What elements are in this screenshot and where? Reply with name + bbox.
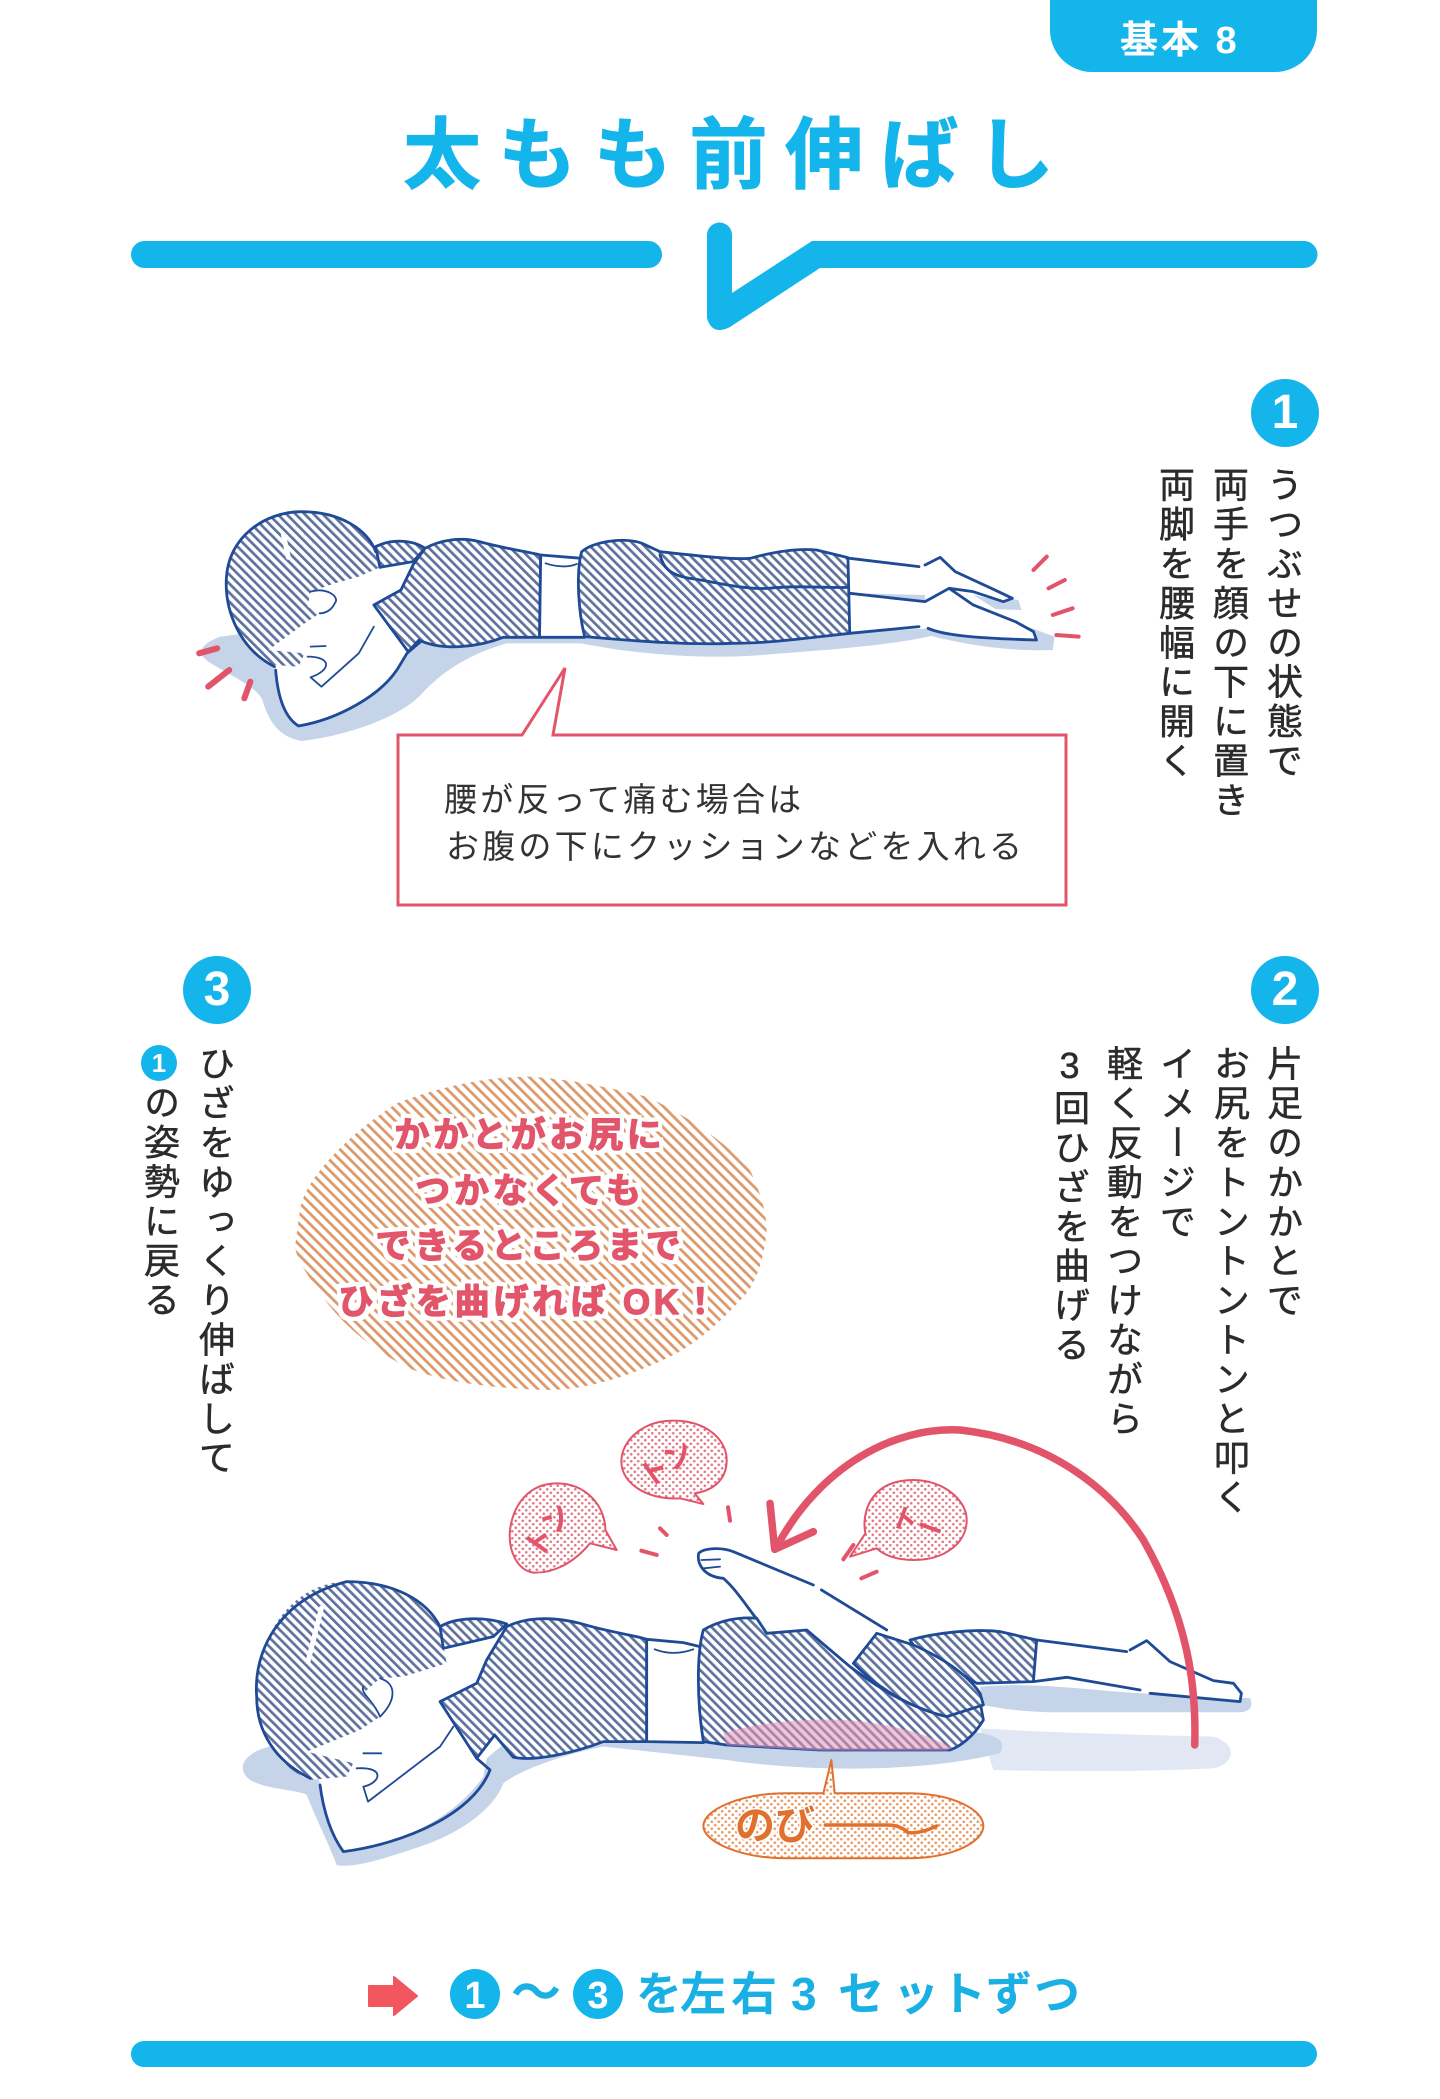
step 2 number <box>1251 956 1319 1024</box>
hips and thighs <box>578 540 850 644</box>
callout: cushion tip <box>398 668 1066 905</box>
pain ticks <box>199 557 1079 698</box>
bottom circled 3: 3 <box>587 1975 609 2017</box>
bottom circled 3 <box>573 1969 623 2019</box>
raised knee <box>853 1633 983 1717</box>
red arrow icon <box>369 1977 417 2015</box>
step 3 number: 3 <box>204 963 230 1016</box>
step 2 text: 3回ひざを曲げる <box>1049 1045 1090 1365</box>
callout text: お腹の下にクッションなどを入れる <box>446 828 1025 865</box>
title underline with check mark <box>131 222 1318 330</box>
blob message: ひざを曲げれば OK！ <box>339 1282 721 1322</box>
blob message: つかなくても <box>415 1172 645 1211</box>
heading tab: 基本 8: 基本 8 <box>1120 20 1240 62</box>
heading tab: 基本 8 <box>1050 0 1317 72</box>
torso <box>374 539 541 652</box>
orange bubble <box>703 1760 983 1858</box>
waist band <box>647 1639 703 1743</box>
hair <box>256 1582 447 1780</box>
stretch wave line <box>825 1825 937 1833</box>
step 3 number <box>183 956 251 1024</box>
lower straight leg <box>1033 1640 1241 1702</box>
tap ticks <box>641 1507 877 1578</box>
callout text: 腰が反って痛む場合は <box>444 781 804 818</box>
near thigh <box>698 1618 983 1750</box>
raised calf and foot <box>698 1549 887 1663</box>
far thigh <box>910 1631 1037 1683</box>
tilde: ～ <box>511 1965 561 2021</box>
step 1 text: 両脚を腰幅に開く <box>1154 466 1195 781</box>
floor shadow <box>201 590 1055 741</box>
step 2 text: 軽く反動をつけながら <box>1102 1045 1143 1439</box>
illustration: step 2-3 heel tapping <box>243 1421 1251 1866</box>
face and arm <box>307 1697 527 1852</box>
bottom circled 1: 1 <box>464 1975 486 2017</box>
legs <box>850 557 1036 640</box>
face and arm <box>268 590 443 726</box>
red motion arrow <box>770 1430 1195 1745</box>
step 2 text: お尻をトントントンと叩く <box>1209 1045 1250 1518</box>
blob message: できるところまで <box>376 1227 684 1266</box>
stretched muscle highlight <box>723 1719 952 1751</box>
shoulder <box>376 541 425 567</box>
step 3 text <box>139 1045 235 1478</box>
step 3 text: ひざをゆっくり伸ばして <box>194 1045 235 1478</box>
bottom circled 1 <box>450 1969 500 2019</box>
step 3 text: の姿勢に戻る <box>139 1084 180 1320</box>
bubble text トン: トン <box>519 1498 578 1564</box>
blob message: かかとがお尻に <box>395 1116 665 1155</box>
step 2 text <box>1049 1045 1303 1518</box>
bubble text のび: のび <box>735 1804 815 1848</box>
step 1 text: うつぶせの状態で <box>1262 466 1303 781</box>
step 2 number: 2 <box>1272 963 1298 1016</box>
bubble text トー: トー <box>887 1501 948 1548</box>
inline circled 1 <box>141 1045 177 1081</box>
bubble text トン: トン <box>634 1435 700 1494</box>
step 1 number <box>1251 379 1319 447</box>
hair <box>226 512 380 667</box>
bubble トン left <box>510 1483 617 1573</box>
bubble トー right <box>850 1480 967 1560</box>
floor shadows <box>243 1685 1251 1866</box>
step 2 text: イメージで <box>1155 1045 1196 1242</box>
torso <box>440 1619 647 1758</box>
step 1 text: 両手を顔の下に置き <box>1208 466 1249 821</box>
step 2 text: 片足のかかとで <box>1262 1045 1303 1321</box>
bubble トン middle <box>621 1421 727 1504</box>
bottom bar <box>131 2041 1317 2067</box>
step 1 number: 1 <box>1272 386 1298 439</box>
shoulder <box>440 1619 507 1648</box>
bottom summary text: を左右3セットずつ <box>636 1968 1080 2020</box>
step 1 text <box>1154 466 1303 821</box>
illustration: step 1 lying face down, legs lifted <box>199 512 1079 741</box>
hatched blob <box>295 1077 767 1390</box>
inline circled 1: 1 <box>152 1048 166 1078</box>
waist band <box>540 555 585 637</box>
blob message <box>339 1116 721 1322</box>
title: 太もも前伸ばし <box>403 111 1072 199</box>
